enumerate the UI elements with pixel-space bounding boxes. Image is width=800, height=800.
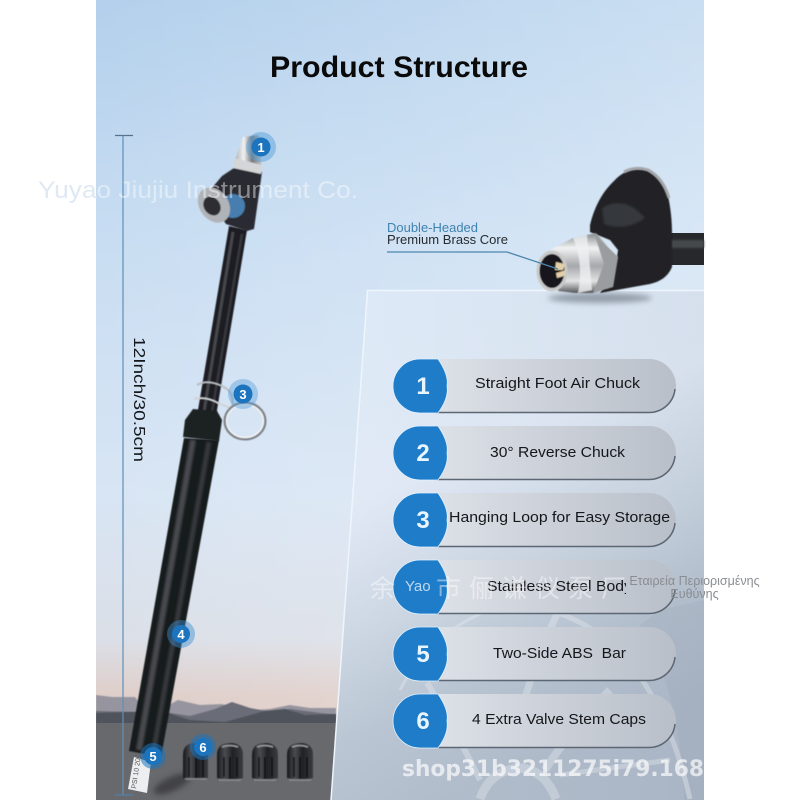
list row 2: reverse chuck: 2 — [416, 440, 430, 467]
callout: premium brass core — [387, 221, 558, 269]
watermark: chinese company name: 余 市俪谦仪泵厂 — [370, 575, 634, 603]
watermark: greek company type: Ευθύνης — [670, 587, 719, 601]
product: tire gauge rod — [128, 135, 265, 793]
list row 1: straight foot air chuck: Straight Foot Air Chuck — [475, 376, 641, 392]
list row 2: reverse chuck — [393, 426, 676, 480]
list row 6: valve stem caps — [393, 694, 676, 748]
metal nozzle — [536, 233, 618, 293]
callout heading: Double-Headed — [387, 221, 478, 235]
watermark: greek company type — [629, 574, 760, 601]
list row 2: reverse chuck: 30° Reverse Chuck — [490, 445, 626, 461]
list row 4: stainless steel body — [393, 560, 676, 614]
list row 3: hanging loop — [393, 493, 676, 547]
watermark: instrument name: Yuyao Jiujiu Instrument Co. — [38, 177, 358, 204]
upper rod — [197, 226, 247, 416]
watermark: greek company type: Εταιρεία Περιορισμένης — [629, 574, 760, 588]
list row 5: ABS bar: 5 — [416, 641, 430, 668]
background: sky and ground — [96, 0, 704, 800]
pressure scale tag — [128, 757, 151, 793]
badge 1: 1 — [257, 140, 265, 155]
callout: premium brass core: Premium Brass Core — [387, 233, 508, 247]
pressure scale tag: PSI 10 20 — [131, 758, 142, 789]
hanging loop — [194, 382, 265, 439]
valve stem caps — [183, 743, 313, 780]
list row 3: hanging loop: Hanging Loop for Easy Storage — [449, 510, 670, 526]
badge 4 — [167, 620, 195, 648]
watermark: Yao: Yao — [405, 578, 431, 595]
detail: enlarged brass chuck head — [536, 168, 704, 303]
list row 1: straight foot air chuck — [393, 359, 676, 413]
badge 3 — [228, 379, 258, 409]
badge 3: 3 — [239, 387, 247, 402]
badge 1 — [246, 132, 276, 162]
dimension label: 12Inch/30.5cm — [130, 337, 147, 462]
badge 6 — [190, 734, 216, 760]
list row 5: ABS bar — [393, 627, 676, 681]
title: Product Structure — [270, 51, 528, 84]
badge 4: 4 — [177, 627, 185, 642]
badge 6: 6 — [199, 740, 207, 755]
double chuck head — [191, 135, 262, 231]
badge 5: 5 — [149, 749, 157, 764]
watermark: instrument name: Yuyao Jiujiu Instrument Co. — [38, 177, 358, 204]
list row 6: valve stem caps: 6 — [416, 708, 430, 735]
list row 5: ABS bar: Two-Side ABS Bar — [493, 646, 626, 662]
badge 5 — [140, 743, 166, 769]
list row 6: valve stem caps: 4 Extra Valve Stem Caps — [472, 712, 646, 728]
list row 3: hanging loop: 3 — [416, 507, 430, 534]
watermark: shop id: shop31b3211275i79.168 — [402, 757, 704, 782]
lower rod — [129, 438, 219, 757]
panel: frosted glass — [331, 290, 704, 800]
list row 4: stainless steel body: Stainless Steel Body — [487, 579, 633, 595]
list row 1: straight foot air chuck: 1 — [416, 373, 430, 400]
rod collar — [183, 409, 222, 441]
